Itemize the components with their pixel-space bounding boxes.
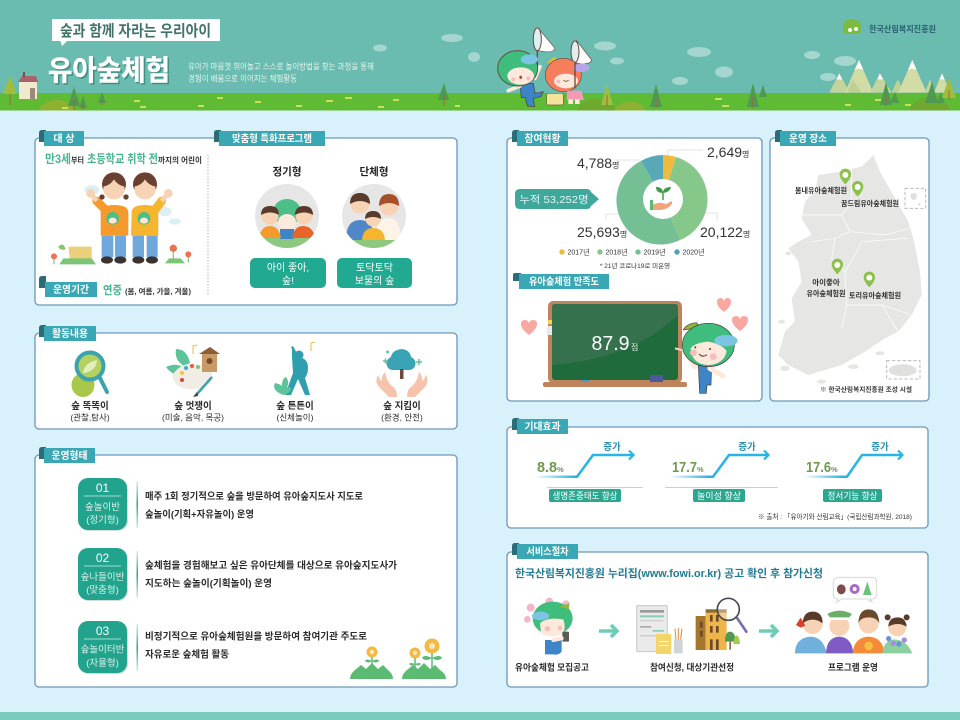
activity label 3: 숲 튼튼이 xyxy=(276,401,314,412)
text: regular class description xyxy=(145,490,363,520)
panel: operation types xyxy=(35,447,457,687)
badge 01: 숲놀이반 xyxy=(85,502,120,513)
text: regular class description: 숲놀이(기획+자유놀이) 운영 xyxy=(145,508,254,520)
tag: operation types xyxy=(39,447,95,463)
button: regular program: 아이 좋아, xyxy=(267,262,309,274)
activity label 2: (미술, 음악, 목공) xyxy=(162,412,224,422)
header tag: subtitle bubble xyxy=(52,19,220,46)
activity label 2: 숲 멋쟁이 xyxy=(174,400,212,412)
effect 2: 17.7 xyxy=(672,459,697,476)
logo: Korea Forest Welfare Institute xyxy=(843,19,936,34)
activity label 3: (신체놀이) xyxy=(277,412,314,422)
header description xyxy=(188,62,374,84)
logo: Korea Forest Welfare Institute: 한국산림복지진흥원 xyxy=(869,24,936,34)
badge 01 xyxy=(78,478,128,531)
button: regular program xyxy=(250,258,326,288)
map of South Korea xyxy=(778,155,926,384)
illustration: flowers xyxy=(350,638,446,679)
text: outing class description: 지도하는 숲놀이(기획놀이) 운영 xyxy=(145,578,272,590)
effect 2: 증가 xyxy=(738,441,756,453)
chart legend: 2017년 xyxy=(568,248,590,256)
effect 2: % xyxy=(697,465,704,474)
button: group program: 보물의 숲 xyxy=(355,275,394,287)
arrow 1 xyxy=(599,625,617,637)
panel: activities xyxy=(35,325,457,429)
score: 87.9 xyxy=(592,333,630,355)
map note: ※ 한국산림복지진흥원 조성 시설 xyxy=(820,384,912,394)
title: 유아숲체험 xyxy=(48,55,170,86)
tag: expected effects xyxy=(512,418,568,434)
effect 2: 놀이성 향상 xyxy=(697,490,741,501)
tag: operation types: 운영형태 xyxy=(52,449,88,462)
tag: activities: 활동내용 xyxy=(52,327,88,340)
activity label 2 xyxy=(162,400,224,422)
chart legend: 2020년 xyxy=(682,248,705,256)
location labels: 아이좋아 xyxy=(812,277,840,287)
badge 02 xyxy=(78,548,128,601)
illustration: chalkboard with score: 점 xyxy=(631,342,638,352)
effect 3 xyxy=(804,441,902,502)
title: 유아숲체험 xyxy=(50,56,172,88)
icon: mascots with butterfly nets xyxy=(498,28,592,107)
effect 2 xyxy=(665,441,778,502)
badge 02: 02 xyxy=(96,551,109,565)
target description: 까지의 어린이 xyxy=(158,155,202,165)
illustration: mascot pointing xyxy=(675,323,738,393)
effect 1: % xyxy=(557,465,564,474)
clouds and hills xyxy=(373,34,856,85)
target description: 초등학교 취학 전 xyxy=(87,151,158,166)
icon: sprout in hand xyxy=(650,187,672,210)
text: outing class description: 숲체험을 경험해보고 싶은 유아단체를 대상으로 유아숲지도사가 xyxy=(145,560,397,572)
effect 1: 생명존중태도 향상 xyxy=(552,490,618,501)
activity label 1 xyxy=(70,401,110,422)
text: playground class description xyxy=(145,630,367,660)
badge 01: 01 xyxy=(96,481,109,495)
activity label 4: (환경, 안전) xyxy=(381,412,423,422)
target description: 만3세 xyxy=(45,152,71,166)
header banner xyxy=(0,0,960,110)
badge 03: 03 xyxy=(96,624,109,638)
tag: satisfaction: 유아숲체험 만족도 xyxy=(529,275,599,288)
location labels: 유아숲체험원 xyxy=(806,288,846,298)
text: playground class description: 비정기적으로 유아숲체험원을 방문하여 참여기관 주도로 xyxy=(145,630,367,642)
step labels: 참여신청, 대상기관선정 xyxy=(650,662,734,672)
icon: hands protecting tree xyxy=(376,349,428,397)
button: group program: 토닥토닥 xyxy=(356,262,393,274)
illustration: chalkboard with score xyxy=(543,301,687,387)
panel: service procedure xyxy=(507,543,928,687)
trees xyxy=(3,76,956,108)
tag: custom program xyxy=(214,130,325,146)
operating period text: 연중 xyxy=(103,284,122,297)
icon: palette and birdhouse xyxy=(166,345,220,397)
text: regular class description: 매주 1회 정기적으로 숲을 방문하여 유아숲지도사 지도로 xyxy=(145,490,363,502)
panel: participation and satisfaction xyxy=(507,130,762,401)
tag: custom program: 맞춤형 특화프로그램 xyxy=(232,132,312,145)
label 2020: 4,788명 xyxy=(577,155,619,171)
activity label 3 xyxy=(276,401,314,422)
target description xyxy=(45,151,202,166)
text: playground class description: 자유로운 숲체험 활동 xyxy=(145,648,229,660)
arrow 2 xyxy=(759,625,777,637)
program type: regular: 정기형 xyxy=(273,165,301,178)
button: group program xyxy=(337,258,412,288)
badge 03: (자율형) xyxy=(86,658,119,669)
panel: target group xyxy=(35,130,457,305)
tag: expected effects: 기대효과 xyxy=(524,420,560,433)
chart legend: 2018년 xyxy=(606,248,628,256)
program type: regular xyxy=(255,165,319,250)
icons: hearts xyxy=(521,298,748,335)
panel: expected effects xyxy=(507,418,928,528)
operating period text xyxy=(103,284,191,297)
step labels xyxy=(515,662,878,672)
badge 02: (맞춤형) xyxy=(86,584,119,596)
tag: service procedure: 서비스절차 xyxy=(526,545,568,558)
step labels: 프로그램 운영 xyxy=(828,662,878,672)
source note: ※ 출처 : 「유아기와 산림교육」(국립산림과학원, 2018) xyxy=(758,512,912,521)
icon: magnifier and leaf xyxy=(72,352,107,397)
chart note: * 21년 코로나19로 미운영 xyxy=(600,261,670,270)
icon: stretching figure xyxy=(274,342,315,395)
program type: group xyxy=(342,165,406,250)
icon: house xyxy=(18,72,38,99)
operating period text: (봄, 여름, 가을, 겨울) xyxy=(125,286,191,296)
effect 3: 정서기능 향상 xyxy=(828,490,878,501)
tag: participation: 참여현황 xyxy=(524,132,560,145)
tag: operating period xyxy=(39,276,97,297)
effect 1: 증가 xyxy=(603,441,621,453)
tag: activities xyxy=(39,325,96,341)
chart legend: 2019년 xyxy=(644,248,666,256)
header description: 유아가 마음껏 뛰어놀고 스스로 놀이방법을 찾는 과정을 통해 xyxy=(188,62,374,72)
location labels xyxy=(795,185,901,300)
tag: satisfaction xyxy=(513,273,609,289)
header tag: subtitle bubble: 숲과 함께 자라는 우리아이 xyxy=(60,22,211,40)
tag: locations: 운영 장소 xyxy=(789,132,827,145)
badge 02: 숲나들이반 xyxy=(81,572,125,583)
location labels: 꿈드림유아숲체험원 xyxy=(841,198,899,208)
location labels: 봄내유아숲체험원 xyxy=(795,185,847,195)
tag: target xyxy=(39,130,84,146)
donut chart: participants by year xyxy=(616,155,708,245)
activity label 4 xyxy=(381,400,423,422)
activity label 4: 숲 지킴이 xyxy=(383,400,421,412)
tag: participation xyxy=(512,130,568,146)
badge 03 xyxy=(78,621,128,674)
panel: locations xyxy=(770,130,929,401)
location labels: 토리유아숲체험원 xyxy=(849,290,901,300)
effect 3: 증가 xyxy=(871,441,889,453)
tag: service procedure xyxy=(512,543,578,559)
illustration: application forms and building xyxy=(637,598,746,654)
illustration: mascot with phone xyxy=(524,598,573,655)
tag: operating period: 운영기간 xyxy=(53,283,89,296)
illustration: stump and flowers xyxy=(51,245,191,264)
effect 1: 8.8 xyxy=(537,459,557,476)
label 2017: 2,649명 xyxy=(707,144,749,160)
callout: cumulative total: 누적 53,252명 xyxy=(520,194,588,206)
button: regular program: 숲! xyxy=(282,275,294,287)
chart legend xyxy=(559,248,705,256)
badge 01: (정기형) xyxy=(86,515,119,526)
step labels: 유아숲체험 모집공고 xyxy=(515,662,589,672)
procedure heading: 한국산림복지진흥원 누리집(www.fowi.or.kr) 공고 확인 후 참가신청 xyxy=(515,566,823,580)
activity label 1: 숲 똑똑이 xyxy=(71,401,109,412)
effect 3: % xyxy=(831,465,838,474)
badge 03: 숲놀이터반 xyxy=(81,644,125,656)
text: outing class description xyxy=(145,560,397,590)
tag: target: 대 상 xyxy=(53,132,75,145)
effect 3: 17.6 xyxy=(806,459,831,476)
illustration: children in program with speech bubble xyxy=(795,577,912,653)
target description: 부터 xyxy=(71,156,84,165)
callout: cumulative total xyxy=(515,189,599,209)
tag: locations xyxy=(775,130,836,146)
effect 1 xyxy=(535,441,643,502)
label 2018: 20,122명 xyxy=(700,224,750,240)
illustration: two children xyxy=(84,172,181,264)
label 2019: 25,693명 xyxy=(577,224,627,240)
activity label 1: (관찰,탐사) xyxy=(70,412,110,422)
header description: 경험이 배움으로 이어지는 체험활동 xyxy=(188,74,297,84)
program type: group: 단체형 xyxy=(360,165,388,178)
